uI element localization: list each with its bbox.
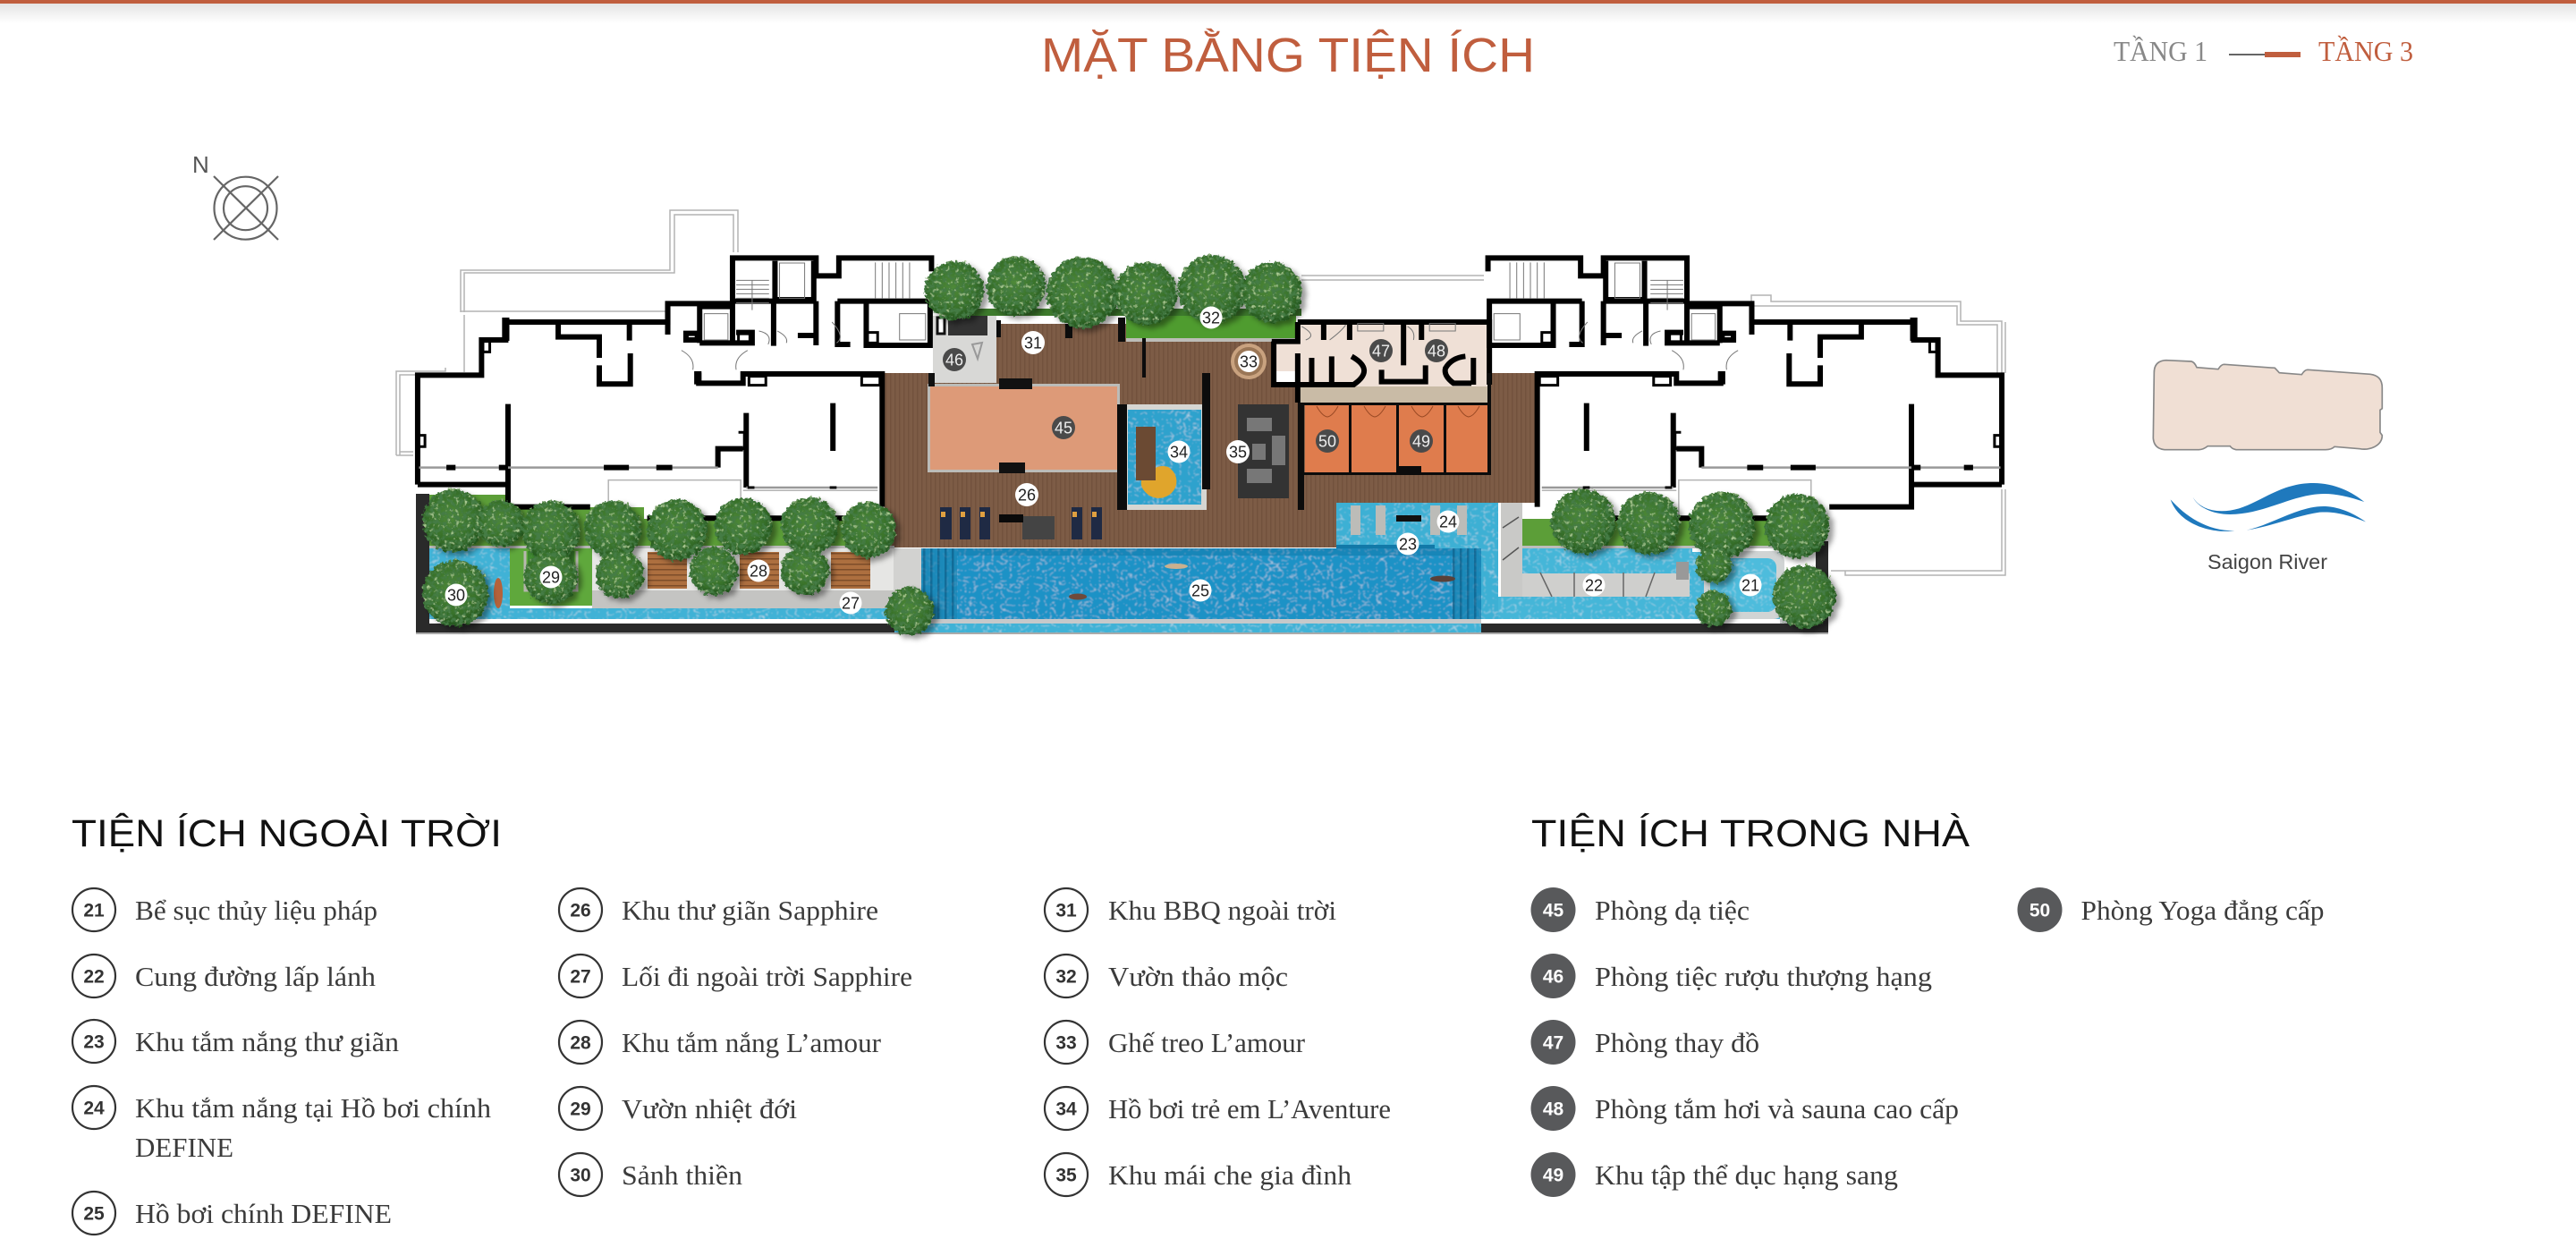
badge 34: 34 (1170, 444, 1188, 462)
badge 45 (1052, 416, 1075, 439)
item 24: 24 (83, 1099, 105, 1118)
item 22: Cung đường lấp lánh (135, 961, 377, 992)
indoor list column 2: item 50: 50 (2029, 900, 2050, 921)
item 35: 35 (1055, 1165, 1077, 1186)
item 49: 49 (1543, 1165, 1563, 1186)
top accent bar (0, 0, 2576, 23)
item 30 (559, 1153, 742, 1196)
item 23: Khu tắm nắng thư giãn (135, 1026, 400, 1057)
badge 28: 28 (750, 562, 767, 580)
item 21: Bể sục thủy liệu pháp (135, 895, 377, 926)
item 21: 21 (83, 900, 105, 921)
indoor list column 1 (1531, 887, 1959, 1197)
item 29: Vườn nhiệt đới (622, 1093, 797, 1124)
item 28: Khu tắm nắng L’amour (622, 1027, 882, 1058)
badge 45: 45 (1055, 419, 1072, 437)
floor 3 label: TẦNG 3 (2318, 35, 2413, 67)
badge 34 (1168, 440, 1190, 463)
indoor list column 2: item 50 (2018, 887, 2324, 932)
item 49: Khu tập thể dục hạng sang (1595, 1159, 1898, 1191)
item 46 (1531, 954, 1932, 998)
badge 23: 23 (1399, 535, 1417, 553)
badge 49: 49 (1412, 433, 1430, 451)
item 34 (1045, 1087, 1391, 1130)
item 45 (1531, 887, 1750, 932)
item 32: Vườn thảo mộc (1108, 961, 1288, 992)
badge 46 (943, 348, 966, 371)
badge 50: 50 (1318, 433, 1336, 451)
floor switcher (2114, 35, 2413, 67)
item 33 (1045, 1021, 1306, 1064)
item 21 (72, 888, 377, 931)
outdoor list column 3 (1045, 888, 1391, 1196)
badge 31 (1021, 331, 1045, 354)
item 49 (1531, 1152, 1898, 1197)
badge 48: 48 (1428, 342, 1445, 360)
badge 22 (1583, 574, 1605, 596)
item 27: 27 (570, 966, 591, 988)
item 24: Khu tắm nắng tại Hồ bơi chính (135, 1092, 492, 1124)
item 47 (1531, 1020, 1759, 1065)
badge 48 (1425, 339, 1448, 362)
badge 23 (1397, 533, 1419, 555)
item 24: DEFINE (135, 1132, 233, 1163)
item 31: Khu BBQ ngoài trời (1108, 895, 1336, 926)
right dark boundary (1481, 541, 1828, 634)
item 46: Phòng tiệc rượu thượng hạng (1595, 961, 1932, 992)
item 35: Khu mái che gia đình (1108, 1159, 1352, 1191)
river label: Saigon River (2207, 550, 2327, 573)
building walls left (418, 258, 931, 518)
floor plan (396, 210, 2005, 635)
indoor list column 2: item 50: Phòng Yoga đẳng cấp (2080, 895, 2324, 926)
badge 21: 21 (1741, 576, 1759, 594)
building walls right (1488, 258, 2002, 518)
badge 50 (1316, 429, 1339, 453)
item 31 (1045, 888, 1336, 931)
badge 24 (1436, 510, 1460, 533)
panel: yoga and gym rooms 49 50 (1300, 373, 1491, 475)
item 25: 25 (83, 1204, 105, 1224)
item 45: Phòng dạ tiệc (1595, 895, 1750, 926)
item 23: 23 (83, 1032, 105, 1052)
item 48: Phòng tắm hơi và sauna cao cấp (1595, 1093, 1959, 1124)
panel: wooden deck (885, 324, 1538, 547)
icon: north compass: N (192, 151, 209, 178)
badge 30 (445, 583, 467, 607)
panel: family cabana 35 (1238, 404, 1289, 498)
item 27 (559, 955, 912, 997)
badge 27: 27 (842, 594, 860, 612)
panel: left garden lawn (429, 495, 886, 547)
item 47: Phòng thay đồ (1595, 1027, 1759, 1058)
item 22 (72, 955, 377, 997)
item 25: Hồ bơi chính DEFINE (135, 1198, 392, 1229)
sun loungers: wood decks 28 (648, 552, 870, 589)
badge 46: 46 (945, 351, 963, 369)
deck furniture: loungers and table (940, 507, 1102, 539)
badge 27 (839, 592, 862, 614)
item 32 (1045, 955, 1288, 997)
badge 35: 35 (1229, 444, 1247, 462)
item 26: Khu thư giãn Sapphire (622, 895, 878, 926)
deck walls (996, 318, 1304, 510)
right outer setback outline (1301, 276, 2005, 575)
left dark boundary (416, 494, 894, 634)
item 28: 28 (570, 1032, 591, 1054)
badge 47 (1369, 339, 1393, 362)
icon: north compass (192, 151, 278, 240)
item 45: 45 (1543, 900, 1563, 921)
panel: changing rooms 47 48 (1272, 322, 1491, 403)
item 33: 33 (1055, 1032, 1077, 1054)
badge 33: 33 (1240, 352, 1258, 370)
panel: right promenade 22 (1498, 503, 1782, 619)
badge 29: 29 (542, 569, 560, 587)
item 48: 48 (1543, 1099, 1563, 1120)
badge 26 (1015, 483, 1038, 506)
item 35 (1045, 1153, 1352, 1196)
floor 1 label: TẦNG 1 (2114, 35, 2207, 67)
badge 25: 25 (1191, 581, 1209, 599)
item 29 (559, 1087, 797, 1130)
panel: kids pool 34 (1117, 404, 1207, 510)
panel: right garden lawn (1522, 519, 1816, 547)
panel: main pool 25 (921, 548, 1481, 619)
panel: sun shelf pool 24 (1336, 503, 1498, 619)
panel: left paving (429, 546, 921, 624)
item 34: 34 (1055, 1099, 1077, 1120)
item 25 (72, 1192, 392, 1235)
key plan: building footprint (2153, 361, 2382, 450)
panel: pool overflow (894, 624, 1481, 632)
title: MẶT BẰNG TIỆN ÍCH (1041, 29, 1535, 82)
item 31: 31 (1055, 900, 1077, 921)
swimmers (1069, 564, 1455, 599)
panel: wine room 46 (933, 316, 996, 383)
loungers in pool (1351, 505, 1467, 535)
badge 26: 26 (1018, 487, 1036, 505)
item 27: Lối đi ngoài trời Sapphire (622, 961, 912, 992)
item 32: 32 (1055, 966, 1077, 988)
badge 49 (1410, 429, 1433, 453)
item 34: Hồ bơi trẻ em L’Aventure (1108, 1093, 1391, 1124)
pool steps (921, 545, 1481, 619)
map number badges (445, 306, 1762, 614)
boat (494, 578, 503, 608)
badge 25 (1190, 580, 1211, 601)
badge 24: 24 (1439, 513, 1457, 531)
badge 30: 30 (447, 587, 465, 605)
panel: therapy spa 21 (1676, 551, 1784, 619)
badge 32: 32 (1202, 310, 1220, 327)
badge 31: 31 (1024, 335, 1042, 352)
item 47: 47 (1543, 1032, 1563, 1054)
item 23 (72, 1020, 400, 1063)
panel: banquet room 45 (928, 373, 1120, 473)
badge 33 (1238, 351, 1259, 372)
badge 32 (1200, 306, 1222, 329)
hanging chair 33 (1231, 344, 1267, 379)
left outer setback outline (396, 210, 738, 455)
badge 35 (1226, 440, 1250, 463)
outdoor list column 1 (72, 888, 492, 1235)
item 28 (559, 1021, 882, 1064)
floor slider (2229, 52, 2301, 57)
badge 29 (540, 565, 562, 589)
heading: outdoor amenities: TIỆN ÍCH NGOÀI TRỜI (72, 812, 502, 855)
outdoor list column 2 (559, 888, 912, 1196)
icon: Saigon river waves (2171, 483, 2366, 531)
heading: indoor amenities: TIỆN ÍCH TRONG NHÀ (1531, 812, 1970, 855)
item 29: 29 (570, 1099, 591, 1120)
badge 47: 47 (1372, 342, 1390, 360)
item 48 (1531, 1086, 1959, 1131)
item 26 (559, 888, 878, 931)
item 46: 46 (1543, 966, 1563, 988)
panel: herb garden 32 (970, 309, 1301, 342)
badge 21 (1739, 574, 1762, 596)
panel: left reflecting water (429, 548, 889, 619)
item 24 (72, 1086, 492, 1163)
item 30: 30 (570, 1165, 591, 1186)
item 33: Ghế treo L’amour (1108, 1027, 1306, 1058)
panel: tropical garden 29 (510, 548, 592, 606)
badge 22: 22 (1585, 576, 1603, 594)
item 26: 26 (570, 900, 591, 921)
item 30: Sảnh thiền (622, 1159, 742, 1191)
item 22: 22 (83, 966, 105, 988)
badge 28 (748, 560, 769, 581)
tree canopy (422, 255, 1835, 635)
